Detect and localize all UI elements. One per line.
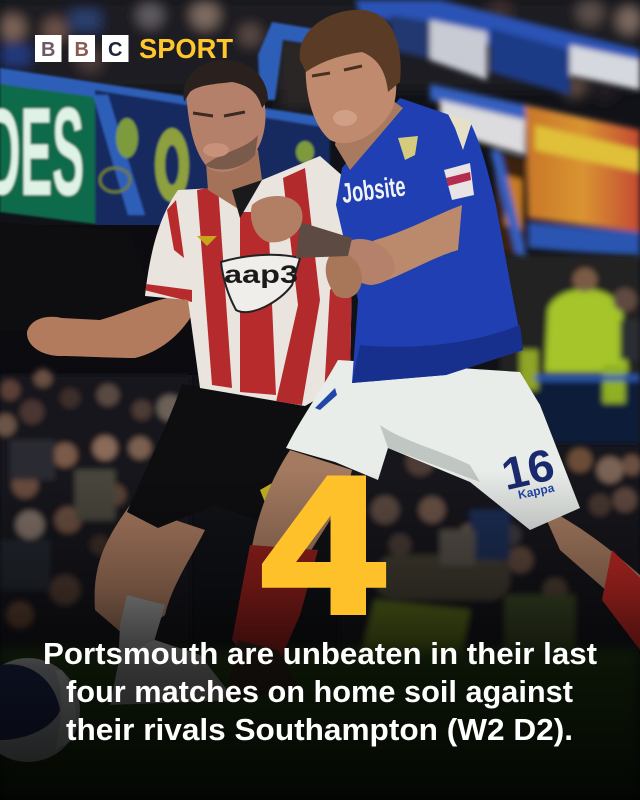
right top hoarding xyxy=(355,0,640,270)
green hoarding panel xyxy=(0,84,95,224)
back leg xyxy=(540,505,640,620)
Sport wordmark: SPORT xyxy=(139,33,233,64)
caption: four matches on home soil against xyxy=(66,674,573,709)
head xyxy=(186,76,266,172)
player: Portsmouth xyxy=(225,10,640,700)
top crowd xyxy=(0,0,640,110)
left crowd xyxy=(0,369,190,665)
pitch xyxy=(0,650,640,800)
jersey xyxy=(145,156,352,406)
sleeve badge xyxy=(444,163,474,200)
BBC blocks: C xyxy=(108,39,122,61)
football xyxy=(0,658,80,762)
outstretched arm xyxy=(27,295,192,358)
player: Southampton xyxy=(27,60,352,705)
fists xyxy=(348,239,395,285)
shorts sponsor: Kappa xyxy=(517,481,556,502)
BBC blocks: B xyxy=(74,39,89,61)
logo: BBC Sport xyxy=(35,33,233,64)
sponsor badge xyxy=(221,255,300,312)
shorts xyxy=(127,384,310,528)
head xyxy=(306,46,396,143)
red sock xyxy=(232,545,318,665)
forearm xyxy=(350,205,462,285)
squad number: 16 xyxy=(497,439,559,500)
neck xyxy=(205,150,262,210)
shirt sponsor: Jobsite xyxy=(340,170,407,209)
caption: their rivals Southampton (W2 D2). xyxy=(66,712,573,747)
steward in hi-vis and right stand xyxy=(500,255,640,445)
right crowd xyxy=(340,445,640,660)
neck xyxy=(335,100,403,170)
left hoarding: rail and navy panel xyxy=(0,22,330,232)
bottom gradient overlay xyxy=(0,470,640,800)
mid dark stand xyxy=(0,225,200,375)
caption: Portsmouth are unbeaten in their last xyxy=(43,636,597,671)
player: Southampton: aap3 xyxy=(224,261,298,289)
standing leg xyxy=(240,450,352,645)
hair xyxy=(300,10,401,92)
caption xyxy=(43,636,597,747)
far leg xyxy=(95,505,205,640)
BBC blocks xyxy=(35,35,128,62)
BBC blocks: B xyxy=(41,39,55,61)
shorts xyxy=(286,360,580,530)
big stat number: 4 xyxy=(262,437,384,653)
hair xyxy=(183,60,268,108)
jersey xyxy=(336,98,523,383)
